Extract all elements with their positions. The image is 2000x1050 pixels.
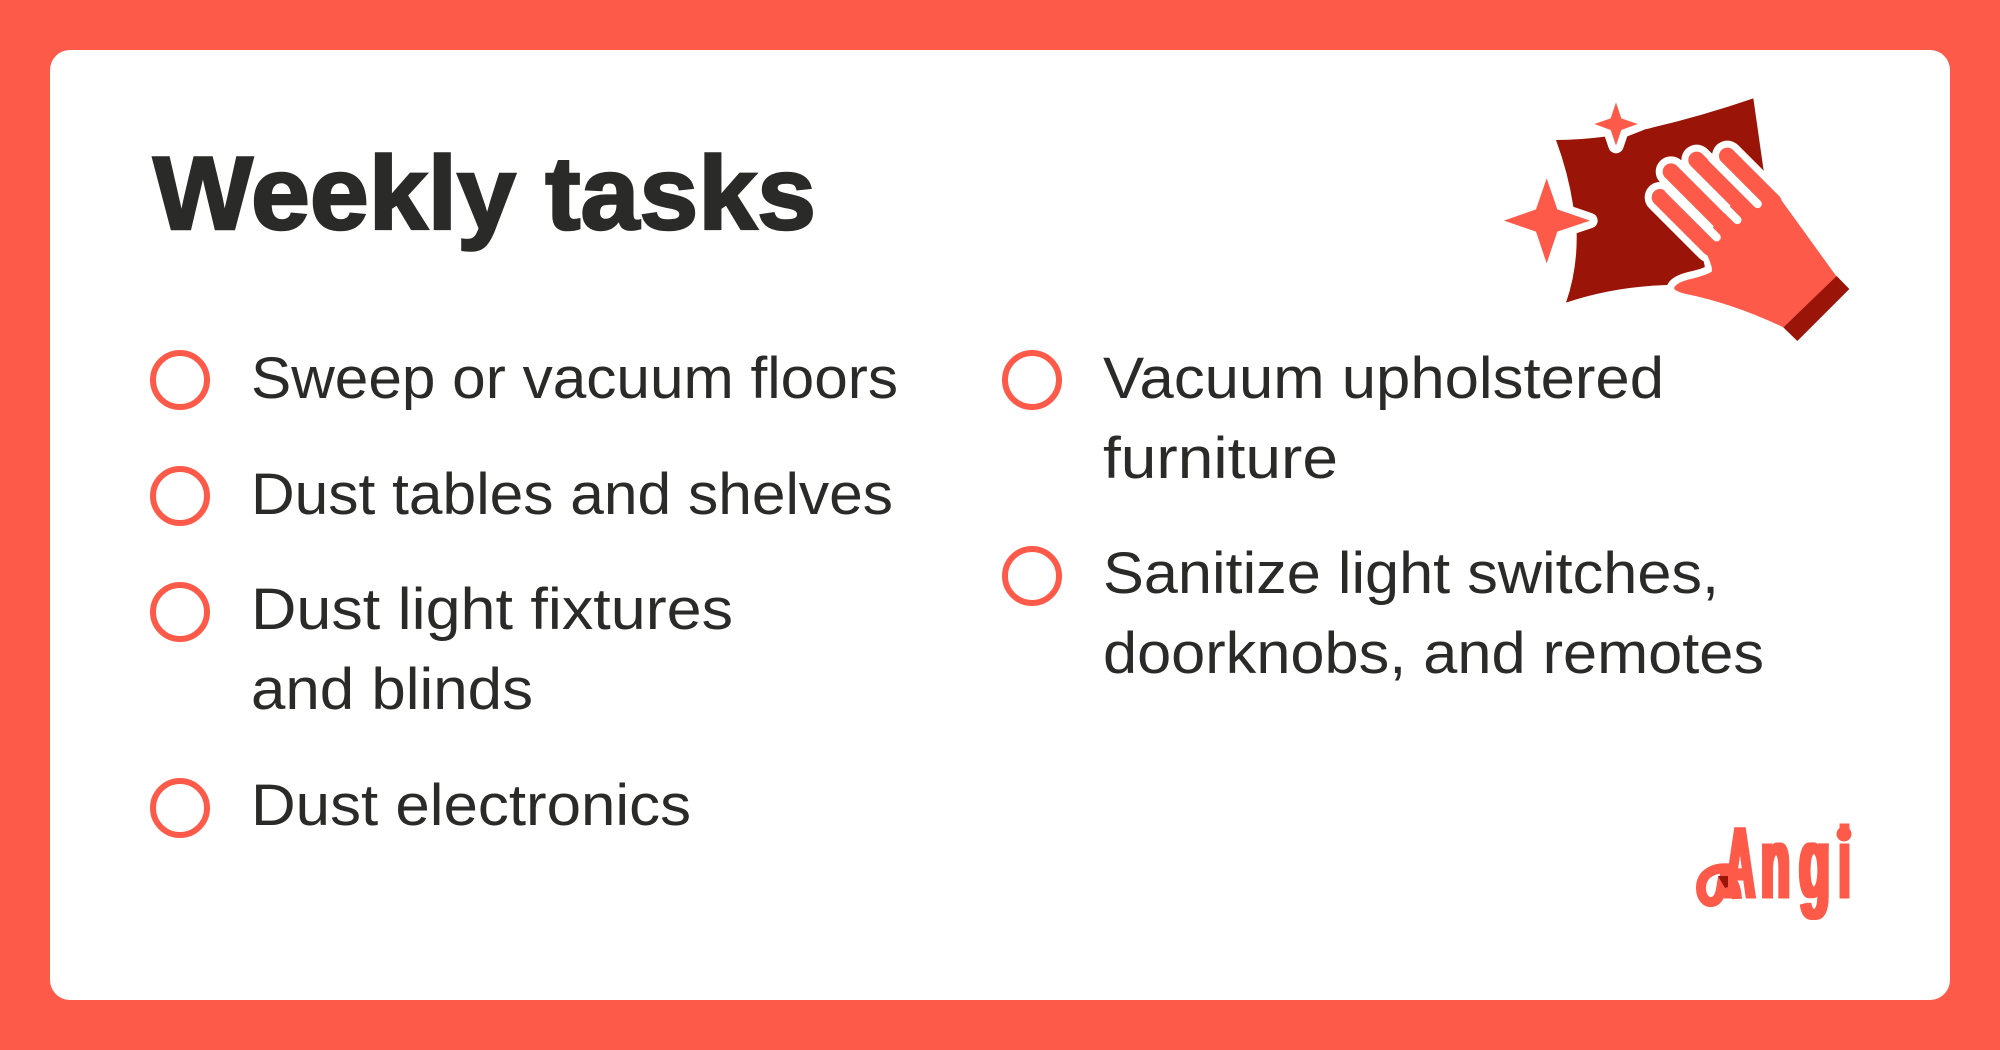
list item: vacuum upholstered furniture: furniture: [1103, 426, 1338, 491]
logo: Angi: n: [1761, 806, 1790, 920]
logo: Angi: [1701, 806, 1852, 920]
list item: sanitize light switches, doorknobs, and remotes: [1005, 541, 1764, 686]
hand: [1660, 156, 1837, 327]
logo: Angi: A: [1725, 806, 1755, 920]
list item: dust light fixtures and blinds: [153, 577, 733, 722]
infographic: weekly tasks card: i: [1839, 806, 1850, 920]
list item: sanitize light switches, doorknobs, and remotes: doorknobs, and remotes: [1103, 621, 1764, 686]
cuff: [1783, 276, 1849, 341]
cloth: [1556, 98, 1780, 303]
logo: Angi: g: [1799, 806, 1830, 920]
list item: vacuum upholstered furniture: [1005, 346, 1664, 491]
list item: sweep or vacuum floors: Sweep or vacuum floors: [251, 346, 898, 411]
list item: dust light fixtures and blinds: Dust light fixtures: [251, 577, 733, 642]
list item: dust electronics: Dust electronics: [251, 773, 691, 838]
list item: dust light fixtures and blinds: and blinds: [251, 657, 533, 722]
title: Weekly tasks: [153, 136, 816, 252]
list item: vacuum upholstered furniture: Vacuum upholstered: [1103, 346, 1664, 411]
list item: dust tables and shelves: Dust tables and shelves: [251, 462, 893, 527]
sparkle: large: [1504, 178, 1590, 263]
sparkle: small: [1594, 102, 1638, 146]
list item: sanitize light switches, doorknobs, and remotes: Sanitize light switches,: [1103, 541, 1719, 606]
icon: hand wiping with cloth and sparkles: [1504, 98, 1849, 341]
